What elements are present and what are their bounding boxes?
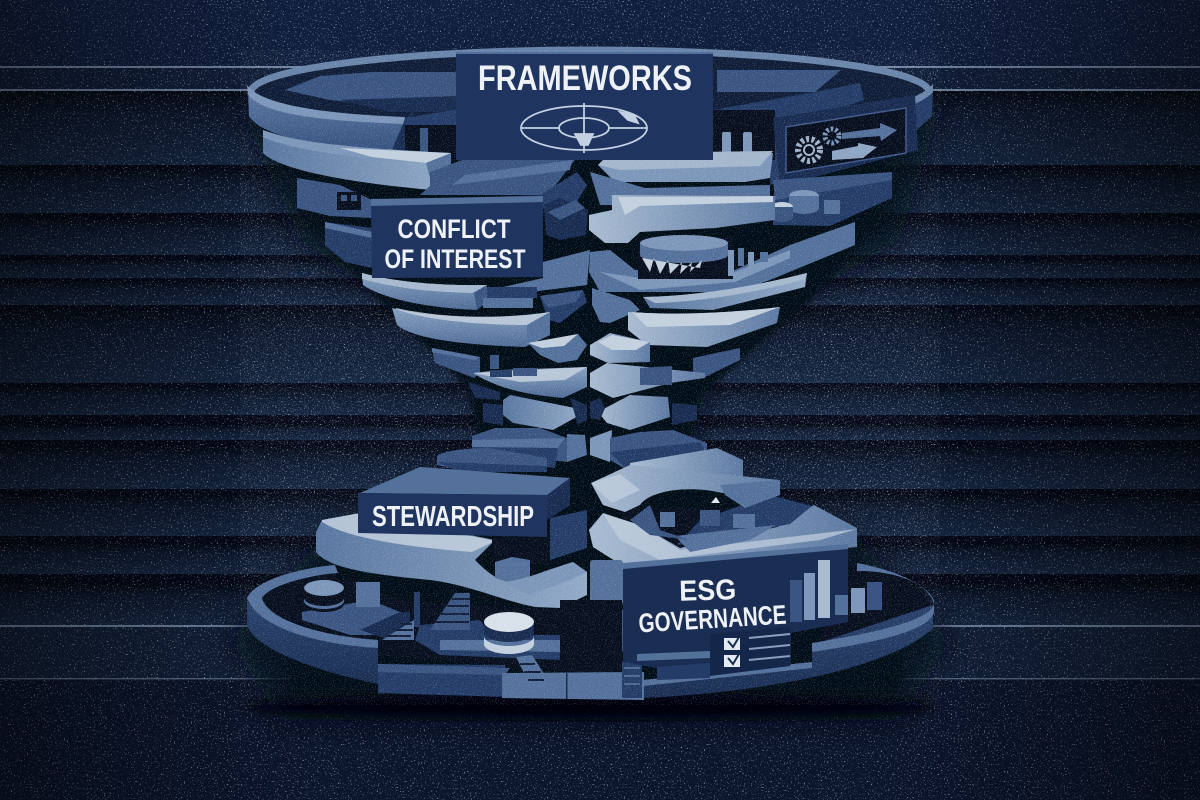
heading: ESG Governance: GOVERNANCE — [638, 600, 787, 639]
interior rooms behind Frameworks — [405, 107, 775, 170]
lower slabs — [437, 428, 743, 486]
tier 3 right — [589, 172, 892, 292]
mid slabs, left side — [362, 273, 587, 430]
checklist — [710, 627, 790, 676]
heading: Frameworks: FRAMEWORKS — [478, 59, 692, 98]
tier 2: light slabs — [263, 130, 773, 215]
panel: Conflict of Interest — [371, 195, 543, 278]
mid slabs, right side — [590, 273, 807, 430]
hourglass structure — [247, 50, 934, 700]
panel: Stewardship — [358, 467, 570, 537]
structure speckle — [240, 50, 940, 705]
chart: bars — [790, 560, 882, 622]
lower tier, right — [589, 465, 857, 653]
heading: Conflict of Interest — [384, 214, 526, 274]
heading: Conflict of Interest: CONFLICT — [398, 214, 511, 244]
heading: ESG Governance — [638, 574, 787, 639]
lower tier, left — [316, 478, 587, 608]
heading: Stewardship: STEWARDSHIP — [372, 501, 534, 533]
panel: ESG Governance — [623, 544, 882, 680]
base ring — [247, 563, 934, 700]
top ring — [247, 50, 933, 185]
tier 3 left — [297, 178, 590, 292]
panel: Frameworks — [456, 52, 713, 160]
steps below panel — [637, 651, 710, 680]
heading: ESG Governance: ESG — [679, 574, 737, 608]
base interior objects — [304, 580, 642, 698]
gear panel — [773, 95, 918, 186]
heading: Conflict of Interest: OF INTEREST — [384, 244, 526, 274]
icon: target diagram — [521, 103, 647, 153]
